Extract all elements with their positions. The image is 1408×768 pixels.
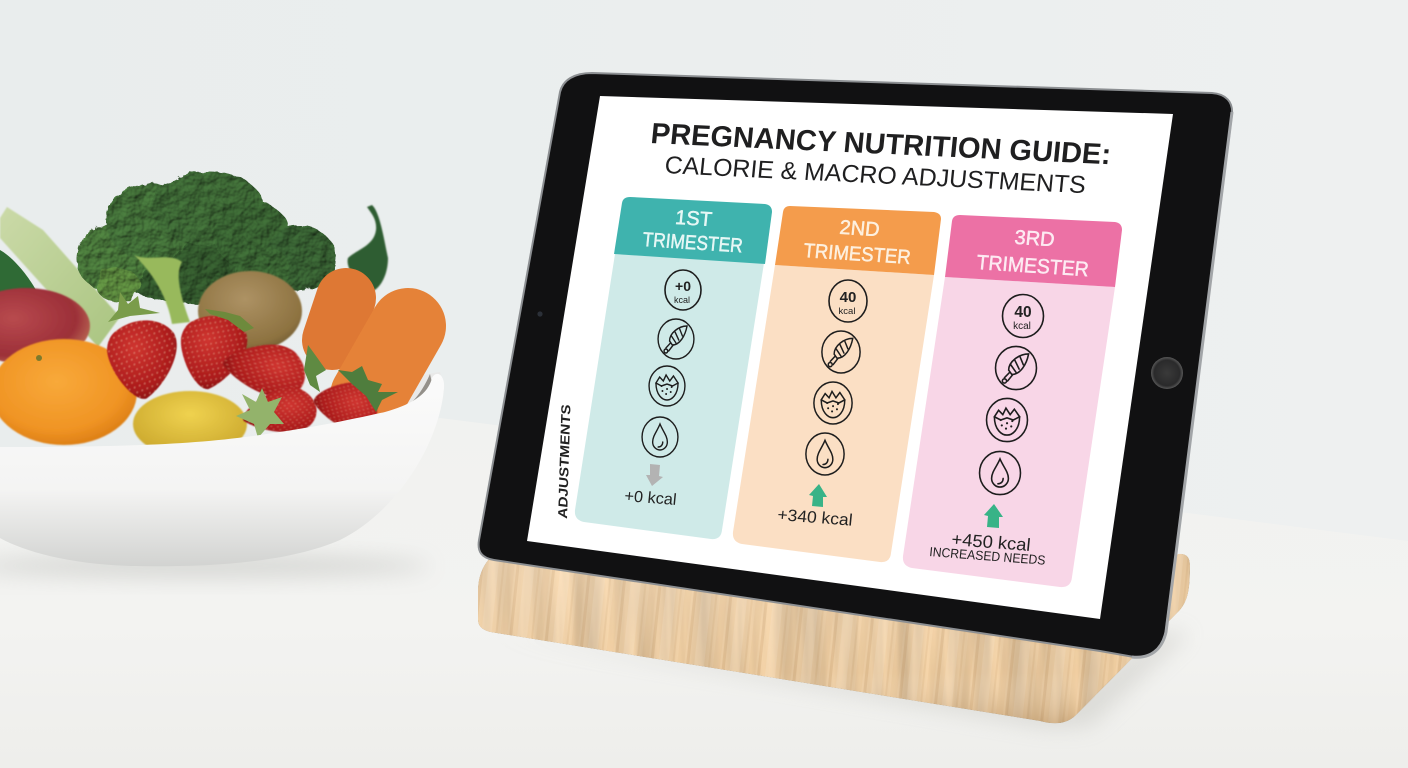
- title: [649, 118, 1112, 199]
- orange: [0, 339, 137, 445]
- silver right edge: [1132, 112, 1232, 657]
- fruit and vegetable bowl: [0, 171, 444, 566]
- side label: ADJUSTMENTS: [555, 403, 573, 519]
- bowl shadow: [0, 555, 430, 577]
- stand stripes: [478, 554, 1190, 723]
- celery: [0, 207, 120, 347]
- column header: [945, 215, 1122, 287]
- calorie circle: [829, 280, 867, 322]
- strawberry 5 leaves: [338, 366, 398, 412]
- strawberry 3: [219, 336, 310, 402]
- table surface: [0, 418, 1408, 768]
- title line 2: CALORIE & MACRO ADJUSTMENTS: [663, 152, 1087, 199]
- bowl inner shadow: [405, 374, 434, 410]
- bowl back rim: [330, 372, 444, 440]
- strawberry 4 leaves: [236, 388, 284, 438]
- carrot front: [368, 326, 408, 396]
- arrow: up: [984, 504, 1003, 528]
- home button: [1151, 357, 1183, 389]
- icon: protein drumstick: [996, 346, 1036, 390]
- broccoli crown: [76, 171, 336, 304]
- header text line 2: TRIMESTER: [976, 251, 1090, 281]
- panel: 1st trimester: [575, 197, 772, 539]
- tablet body: [479, 73, 1232, 657]
- bamboo tablet stand: [478, 554, 1190, 723]
- carrot back: [332, 298, 346, 340]
- icon: protein drumstick: [658, 319, 694, 359]
- stand body: [478, 554, 1190, 723]
- calorie circle: [665, 270, 701, 310]
- icon: fat drop: [980, 451, 1020, 495]
- stand shadow: [490, 632, 1190, 728]
- column body: [575, 254, 764, 539]
- calorie circle: kcal: [674, 295, 690, 305]
- increased needs note: INCREASED NEEDS: [929, 544, 1046, 568]
- orange stem: [36, 355, 42, 361]
- icon: strawberry carbs: [814, 382, 852, 424]
- kcal value: +450 kcal: [951, 529, 1032, 555]
- kcal value: +0 kcal: [624, 487, 677, 509]
- camera dot: [537, 311, 543, 317]
- broccoli stem: [134, 255, 190, 324]
- column body: [733, 265, 934, 562]
- panel: 2nd trimester: [733, 206, 941, 562]
- panel: 3rd trimester: [903, 215, 1122, 587]
- strawberry 1 leaves: [108, 292, 160, 322]
- lemon: [133, 391, 247, 457]
- kcal value: +340 kcal: [777, 505, 853, 530]
- calorie circle: 40: [840, 289, 856, 306]
- column body: [903, 277, 1115, 587]
- kiwi: [198, 271, 302, 351]
- header text line 2: TRIMESTER: [642, 229, 744, 257]
- strawberry 2 leaves: [205, 309, 254, 332]
- screen: [527, 96, 1173, 619]
- icon: protein drumstick: [822, 331, 860, 373]
- icon: fat drop: [642, 417, 678, 457]
- strawberry 2: [172, 309, 252, 395]
- bowl body: [0, 374, 444, 566]
- calorie circle: 40: [1014, 304, 1032, 321]
- header text: 2ND: [839, 217, 881, 241]
- calorie circle: kcal: [839, 306, 855, 317]
- arrow: up: [809, 484, 827, 507]
- calorie circle: +0: [675, 278, 691, 294]
- pepper: [348, 205, 388, 292]
- strawberry 1: [107, 320, 177, 399]
- tablet: [479, 73, 1232, 657]
- column header: [614, 197, 772, 264]
- header text: 3RD: [1014, 227, 1056, 251]
- calorie circle: [1002, 294, 1044, 338]
- strawberry 4: [239, 383, 320, 440]
- stand front shading: [478, 554, 1098, 723]
- icon: strawberry carbs: [987, 398, 1027, 442]
- strawberry 3 leaves: [304, 345, 326, 392]
- arrow: down: [646, 464, 663, 486]
- strawberry 5: [310, 376, 382, 434]
- dark leaf: [0, 250, 36, 296]
- apple: [0, 288, 90, 364]
- icon: fat drop: [806, 433, 844, 475]
- title line 1: PREGNANCY NUTRITION GUIDE:: [649, 118, 1112, 171]
- column header: [775, 206, 941, 275]
- icon: strawberry carbs: [649, 366, 685, 406]
- header text: 1ST: [674, 207, 713, 231]
- header text line 2: TRIMESTER: [803, 240, 912, 269]
- calorie circle: kcal: [1013, 321, 1031, 332]
